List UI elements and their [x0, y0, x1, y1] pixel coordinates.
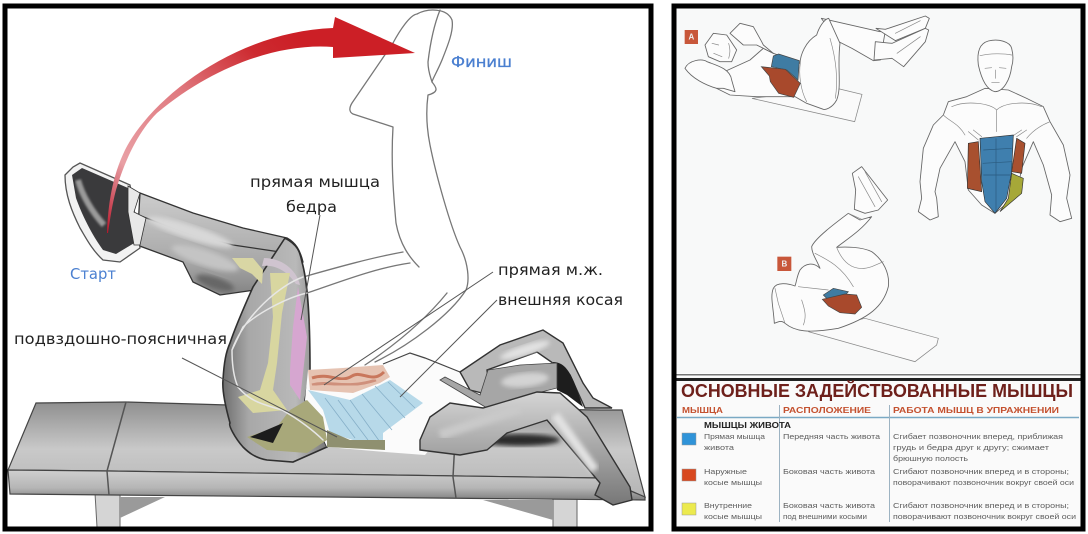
- table rows: поворачивают позвоночник вокруг своей оси: [893, 512, 1076, 521]
- label: external oblique: внешняя косая: [498, 291, 623, 309]
- muscle: rectus abdominis A: [771, 54, 799, 80]
- pelvis bones: [247, 400, 385, 453]
- badge A: A: [688, 32, 694, 41]
- label: start: Старт: [70, 265, 116, 283]
- muscle: oblique A: [761, 67, 800, 97]
- table rows: грудь и бедра друг к другу; сжимает: [893, 443, 1050, 452]
- ghost leg: finish position: [303, 10, 468, 365]
- table rows: поворачивают позвоночник вокруг своей оси: [893, 478, 1074, 487]
- label: rectus femoris second line: бедра: [286, 198, 337, 216]
- muscle: internal oblique: [1000, 173, 1023, 212]
- table rows: косые мышцы: [704, 512, 762, 521]
- column headers: МЫШЦА: [682, 405, 723, 415]
- bench: [8, 402, 645, 527]
- torso: shirt and abdominal muscles: [305, 353, 470, 455]
- column headers: РАБОТА МЫШЦ В УПРАЖНЕНИИ: [893, 405, 1059, 415]
- ghost lines over thigh: [232, 277, 323, 440]
- label: finish: Финиш: [451, 53, 512, 71]
- panel: sit-up anatomy illustration: [5, 6, 653, 531]
- column headers: РАСПОЛОЖЕНИЕ: [783, 405, 871, 415]
- panel: exercise reference page: [674, 6, 1085, 531]
- pink thigh muscle: [290, 287, 307, 400]
- leader lines: [182, 215, 497, 437]
- table rows: Прямая мышца: [704, 432, 766, 441]
- table rows: Передняя часть живота: [783, 432, 881, 441]
- figure: front view torso: [918, 40, 1072, 222]
- body: shins: [130, 193, 303, 295]
- table rows: Сгибают позвоночник вперед и в стороны;: [893, 467, 1069, 476]
- muscle: rectus abdominis front: [980, 135, 1013, 213]
- table rows: Сгибает позвоночник вперед, приближая: [893, 432, 1063, 441]
- muscle: rectus abdominis B: [823, 288, 848, 300]
- table rows: Боковая часть живота: [783, 501, 876, 510]
- table rows: Наружные: [704, 467, 747, 476]
- table rows: косые мышцы: [704, 478, 762, 487]
- muscle: right oblique: [1012, 138, 1025, 173]
- upper body: raised arm, face, hair, front arm: [420, 330, 632, 505]
- knee bones and femur: [232, 258, 300, 413]
- badge B: B: [781, 259, 787, 268]
- column headers: [682, 405, 1059, 415]
- muscle: left oblique: [967, 142, 982, 192]
- table rows: МЫШЦЫ ЖИВОТА: [704, 421, 791, 430]
- red motion arrow: [107, 17, 415, 233]
- badge B: [777, 257, 791, 271]
- swatch: internal oblique: [682, 503, 696, 515]
- table rows: Боковая часть живота: [783, 467, 876, 476]
- muscle: oblique B: [822, 294, 862, 314]
- table rows: [704, 421, 1076, 521]
- table rows: Внутренние: [704, 501, 752, 510]
- table rows: брюшную полость: [893, 454, 968, 463]
- body: thigh: [223, 238, 327, 462]
- label: rectus femoris: прямая мышца: [250, 173, 380, 191]
- swatch: rectus abdominis: [682, 433, 696, 445]
- table rows: живота: [704, 443, 735, 452]
- label: rectus abdominis: прямая м.ж.: [498, 261, 603, 279]
- swatch: external oblique: [682, 469, 696, 481]
- table rows: под внешними косыми: [783, 512, 867, 521]
- table of muscles: [676, 370, 1081, 527]
- badge A: [685, 30, 698, 44]
- table title: ОСНОВНЫЕ ЗАДЕЙСТВОВАННЫЕ МЫШЦЫ: [681, 380, 1073, 401]
- figure B: crunch top: [772, 167, 938, 362]
- shoes: [65, 163, 146, 262]
- table rows: Сгибают позвоночник вперед и в стороны;: [893, 501, 1069, 510]
- label: iliopsoas: подвздошно-поясничная: [14, 330, 227, 348]
- figure A: crunch start: [685, 16, 929, 122]
